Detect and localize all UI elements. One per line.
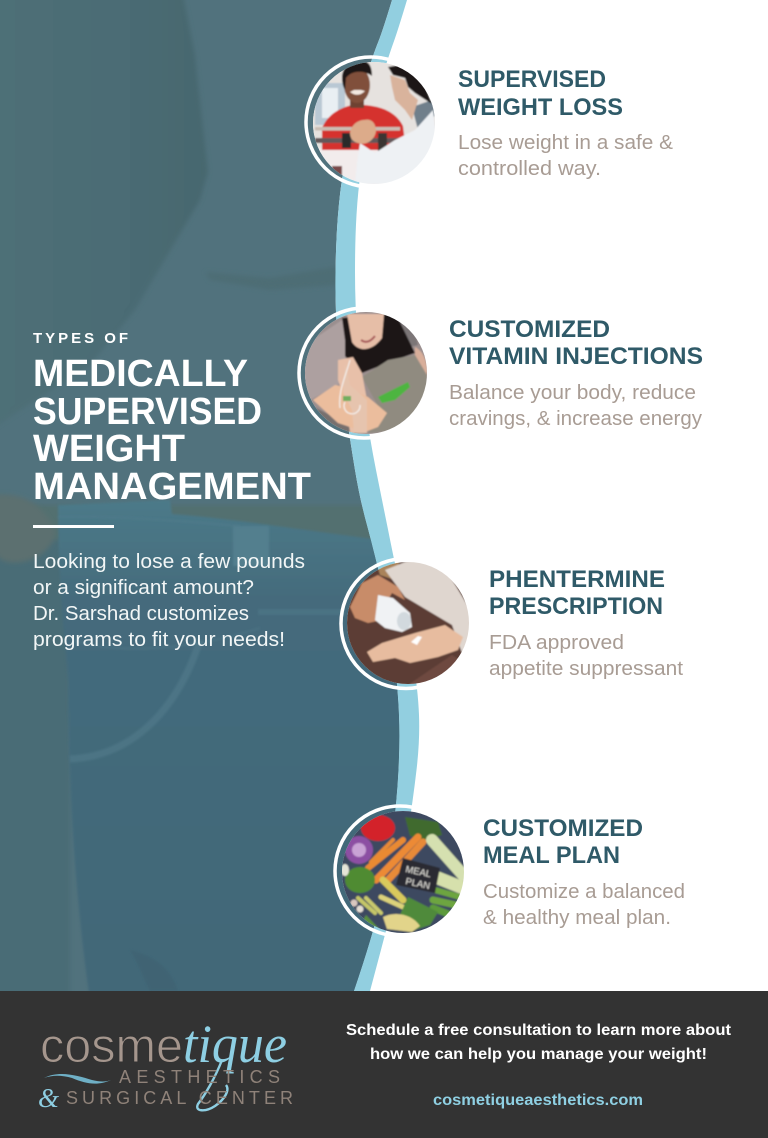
logo: cosmetique aesthetics and surgical center: SURGICAL CENTER [66,1088,293,1108]
heading: PRESCRIPTION [489,593,663,620]
background photo: waist in loose jeans with teal tint [0,0,420,1000]
description [458,132,674,180]
title: medically supervised weight management: MEDICALLY [33,353,248,395]
description: Lose weight in a safe & [458,132,674,154]
website link: cosmetiqueaesthetics.com [433,1092,643,1109]
logo: cosmetique aesthetics and surgical center: AESTHETICS [119,1067,280,1087]
description: & healthy meal plan. [483,907,671,929]
description: Balance your body, reduce [449,382,696,404]
heading [458,66,623,121]
eyebrow: types of: TYPES OF [33,330,128,347]
footer bar [0,991,768,1138]
description: appetite suppressant [489,658,683,680]
description [483,881,685,929]
intro paragraph: or a significant amount? [33,577,254,599]
heading: VITAMIN INJECTIONS [449,343,703,370]
panel: customized vitamin injections [299,308,703,440]
description: cravings, & increase energy [449,408,702,430]
photo: vegetables with meal plan sign: MEAL [404,864,432,880]
description: controlled way. [458,158,601,180]
panel: phentermine prescription [340,555,683,690]
photo: pills poured into palm [340,555,475,690]
title: medically supervised weight management: SUPERVISED [33,391,262,433]
heading: WEIGHT LOSS [458,94,623,121]
title: medically supervised weight management: MANAGEMENT [33,466,311,508]
heading: SUPERVISED [458,66,606,93]
heading: MEAL PLAN [483,842,620,869]
photo: doctor weighing patient [306,57,440,190]
heading: PHENTERMINE [489,566,665,593]
logo: cosmetique aesthetics and surgical center: & [38,1083,59,1113]
description [489,632,683,680]
description [449,382,702,430]
photo: vegetables with meal plan sign: PLAN [404,876,431,892]
description: FDA approved [489,632,624,654]
intro paragraph: Dr. Sarshad customizes [33,603,249,625]
left panel: heading and intro [33,330,311,651]
call to action: Schedule a free consultation to learn more about [346,1022,732,1039]
description: Customize a balanced [483,881,685,903]
logo: cosmetique aesthetics and surgical center: cosme [40,1020,183,1073]
intro paragraph [33,551,305,651]
curved light blue band [335,0,419,991]
logo: cosmetique aesthetics and surgical center: tique [183,1014,287,1074]
intro paragraph: Looking to lose a few pounds [33,551,305,573]
call to action: how we can help you manage your weight! [370,1046,707,1063]
logo: cosmetique aesthetics and surgical center [38,1014,293,1113]
photo: vegetables with meal plan sign [335,806,465,936]
intro paragraph: programs to fit your needs! [33,629,285,651]
title: medically supervised weight management: WEIGHT [33,428,185,470]
heading: CUSTOMIZED [483,815,643,842]
panel: supervised weight loss [306,57,674,190]
heading [489,566,665,620]
heading [483,815,643,869]
panel: customized meal plan [335,806,685,936]
call to action [346,1022,732,1063]
heading: CUSTOMIZED [449,316,610,343]
photo: woman receiving IV drip [299,308,435,440]
title: medically supervised weight management [33,353,311,508]
heading [449,316,703,370]
